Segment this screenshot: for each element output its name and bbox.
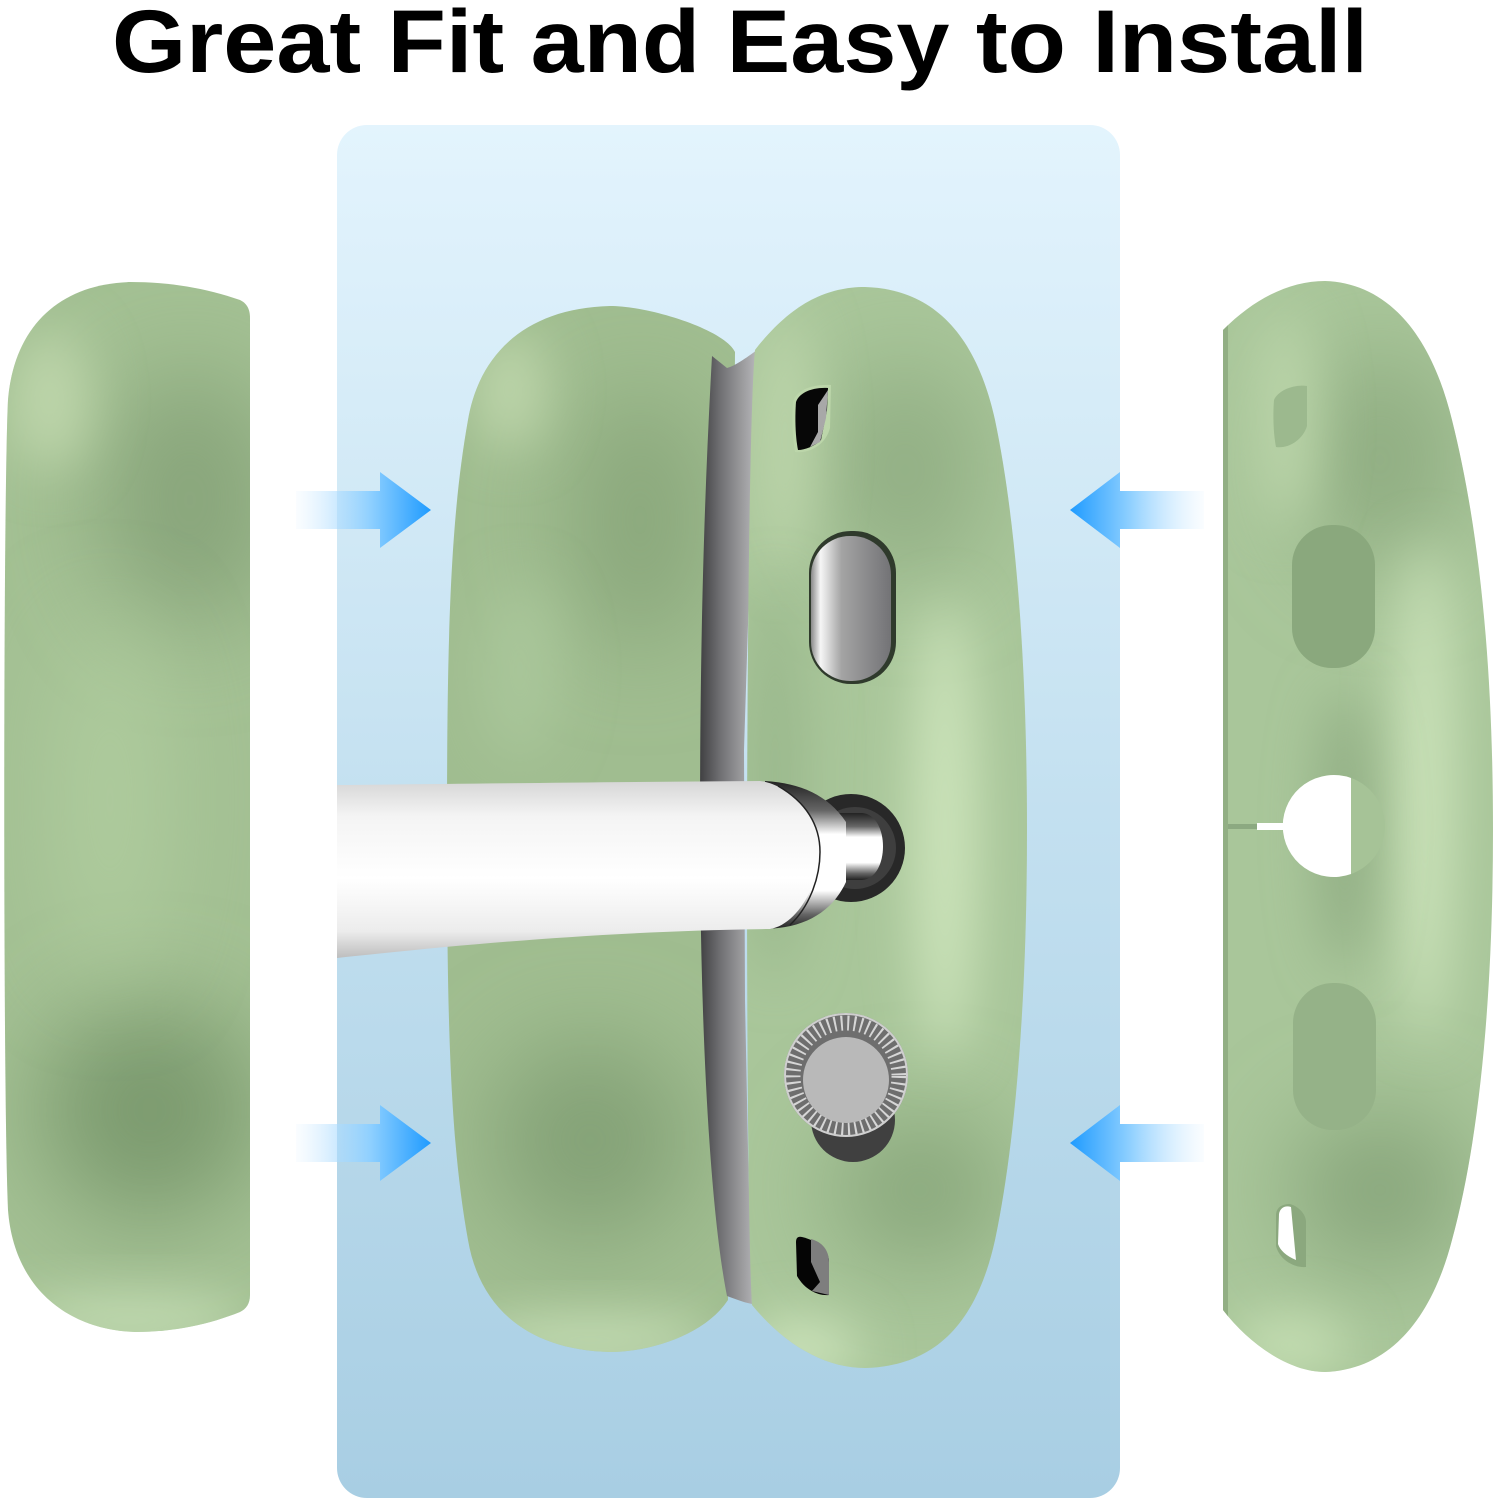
cutout: button recess <box>1292 525 1375 668</box>
arrow: lower left <box>296 1105 431 1181</box>
cutout: bottom vent <box>1276 1204 1306 1267</box>
cutout: top vent <box>1273 386 1307 447</box>
headphone: metal band between cushions <box>700 350 757 1304</box>
icon: top vent slot <box>792 385 831 452</box>
arrow: upper left <box>296 472 431 548</box>
panel: blue background card <box>337 125 1120 1498</box>
icon: bottom vent slot <box>796 1237 829 1295</box>
icon: digital crown <box>784 1013 908 1162</box>
arrow: lower right <box>1070 1105 1204 1181</box>
headphone: right cushion cover <box>740 280 1035 1380</box>
headphone: headband tube <box>337 781 846 958</box>
icon: noise control button <box>809 531 896 684</box>
cutout: stem hole with slit <box>1228 775 1385 877</box>
headphone: speaker stem socket <box>797 794 905 902</box>
arrow: upper right <box>1070 472 1204 548</box>
cutout: crown recess <box>1293 983 1376 1130</box>
right cushion cover piece <box>1220 275 1496 1375</box>
left cushion cover piece <box>4 282 250 1332</box>
headphone: left cushion cover <box>440 300 740 1360</box>
